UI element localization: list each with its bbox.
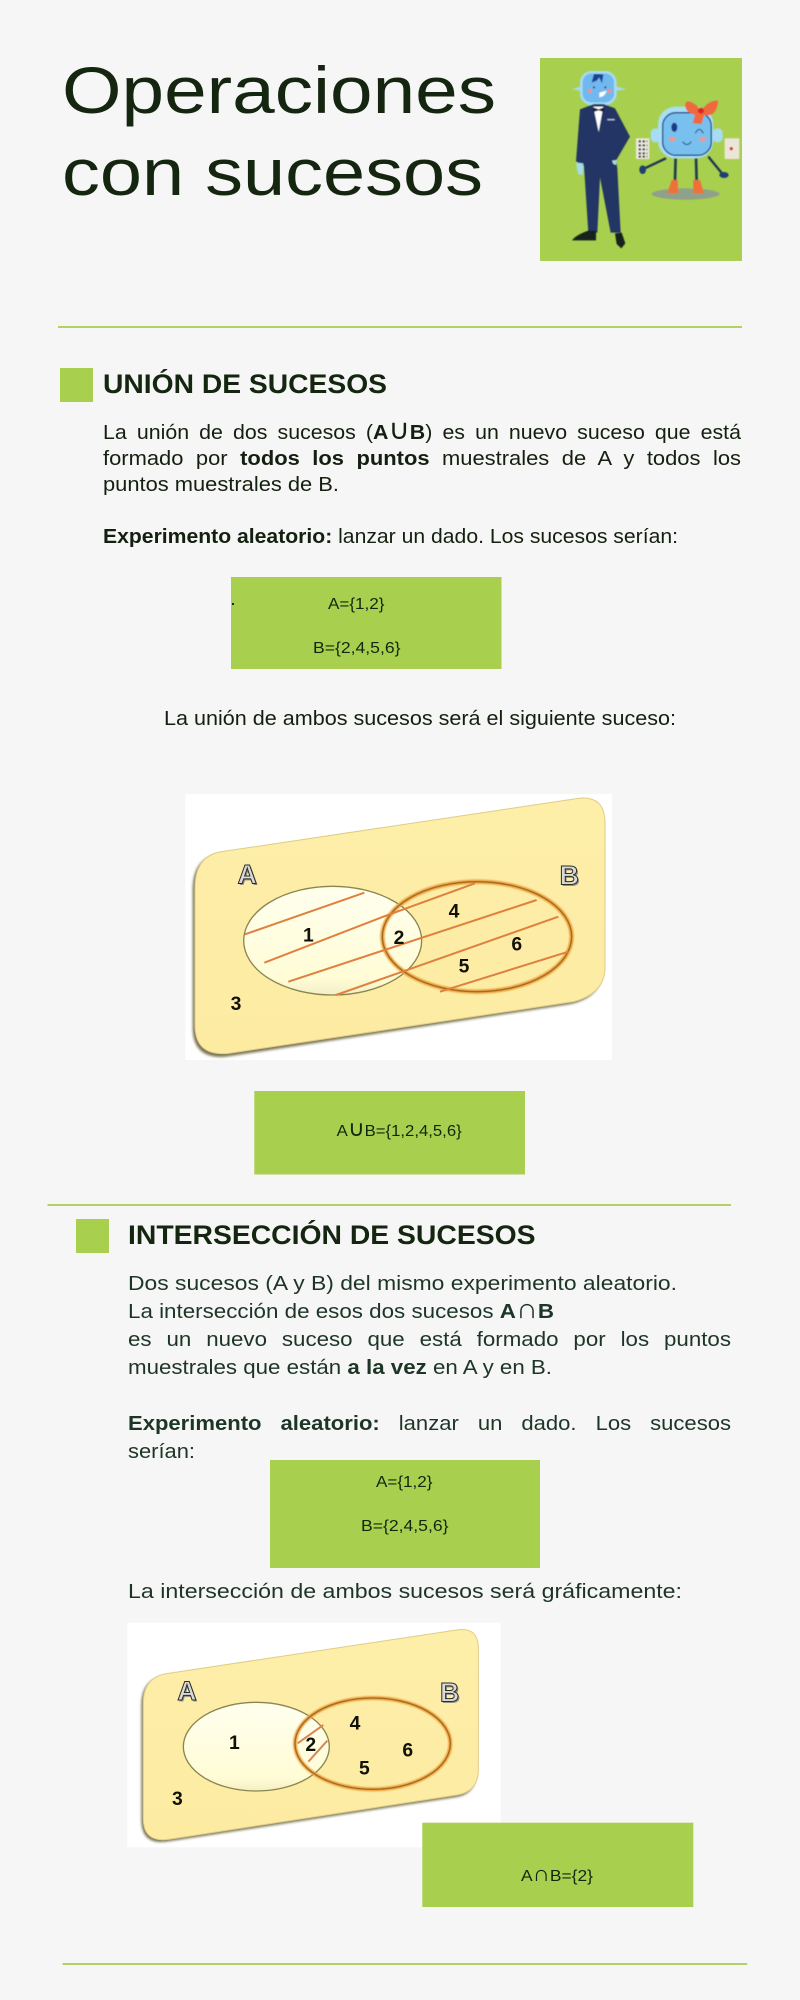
- icon: green square: [76, 1219, 109, 1253]
- text block: interseccion lead-in: La intersección de ambos sucesos será gráficamente:: [128, 1580, 682, 1603]
- callout: intersection result: A∩B={2}: [521, 1861, 594, 1886]
- set labels: A: [179, 1677, 198, 1707]
- hatch lines: [245, 883, 568, 995]
- callout: sets A and B: [231, 577, 502, 669]
- divider bottom: [62, 1963, 747, 1965]
- title: [62, 53, 496, 209]
- callout: sets A and B: A={1,2}: [328, 596, 385, 613]
- set labels: 6: [402, 1741, 413, 1762]
- text block: experimento interseccion: [128, 1412, 731, 1463]
- callout: sets A and B: [270, 1460, 540, 1568]
- heading: union: UNIÓN DE SUCESOS: [103, 368, 387, 399]
- set labels: B: [441, 1679, 461, 1709]
- heading: interseccion: INTERSECCIÓN DE SUCESOS: [128, 1219, 536, 1250]
- callout: intersection result: [422, 1823, 693, 1907]
- text block: interseccion definition: es un nuevo suceso que está formado por los puntos: [128, 1328, 731, 1351]
- text block: experimento interseccion: Experimento aleatorio: lanzar un dado. Los sucesos: [128, 1412, 731, 1435]
- callout: sets A and B: B={2,4,5,6}: [313, 640, 401, 657]
- set labels: [172, 1676, 461, 1810]
- set labels: 2: [305, 1735, 316, 1756]
- text block: experimento interseccion: serían:: [128, 1440, 195, 1463]
- set labels: 3: [172, 1789, 183, 1810]
- set labels: 5: [359, 1758, 370, 1779]
- set labels: B: [440, 1678, 459, 1708]
- panel: union de sucesos heading: [60, 368, 387, 402]
- set labels: 4: [449, 901, 460, 922]
- set labels: [231, 860, 580, 1015]
- set labels: A: [177, 1676, 197, 1706]
- icon: girl robot holding cards: [636, 101, 739, 200]
- set labels: 1: [229, 1733, 240, 1754]
- text block: experimento union: Experimento aleatorio: lanzar un dado. Los sucesos serían:: [103, 525, 678, 548]
- set labels: A: [238, 860, 257, 890]
- text block: union definition: puntos muestrales de B.: [103, 473, 339, 496]
- text block: interseccion definition: Dos sucesos (A y B) del mismo experimento aleatorio.: [128, 1272, 677, 1295]
- text block: union definition: La unión de dos sucesos ( A∪B) es un nuevo suceso que está: [103, 414, 742, 445]
- text block: interseccion definition: muestrales que están a la vez en A y en B.: [128, 1356, 552, 1379]
- divider top: [58, 326, 742, 328]
- text block: interseccion definition: [128, 1272, 731, 1379]
- title: Operaciones: [62, 53, 496, 127]
- chart: venn diagram intersection: [127, 1623, 501, 1847]
- callout: union result: [254, 1091, 525, 1174]
- illustration: two robot characters on green panel: [540, 58, 742, 261]
- text block: union definition: formado por todos los puntos muestrales de A y todos los: [103, 447, 741, 470]
- callout: sets A and B: B={2,4,5,6}: [361, 1518, 449, 1535]
- set labels: B: [560, 861, 579, 891]
- hatch lines: [298, 1725, 327, 1762]
- callout: union result: A∪B={1,2,4,5,6}: [337, 1116, 462, 1141]
- icon: man in tuxedo: [572, 72, 630, 248]
- text block: interseccion definition: La intersección de esos dos sucesos A∩B: [128, 1293, 554, 1324]
- set labels: 3: [231, 994, 242, 1015]
- set labels: 6: [511, 935, 522, 956]
- callout: sets A and B: A={1,2}: [376, 1474, 433, 1491]
- text block: union lead-in: La unión de ambos sucesos será el siguiente suceso:: [164, 707, 676, 730]
- set labels: B: [561, 862, 580, 892]
- set labels: 4: [350, 1713, 361, 1734]
- set labels: 2: [394, 928, 404, 949]
- panel: interseccion heading: [76, 1219, 536, 1253]
- set labels: A: [239, 861, 258, 891]
- set labels: 1: [303, 926, 314, 947]
- text block: union definition: [103, 414, 742, 496]
- set labels: 5: [459, 957, 470, 978]
- divider middle: [48, 1204, 731, 1206]
- title: con sucesos: [62, 135, 483, 209]
- icon: green square: [60, 368, 93, 402]
- chart: venn diagram union: [185, 794, 612, 1060]
